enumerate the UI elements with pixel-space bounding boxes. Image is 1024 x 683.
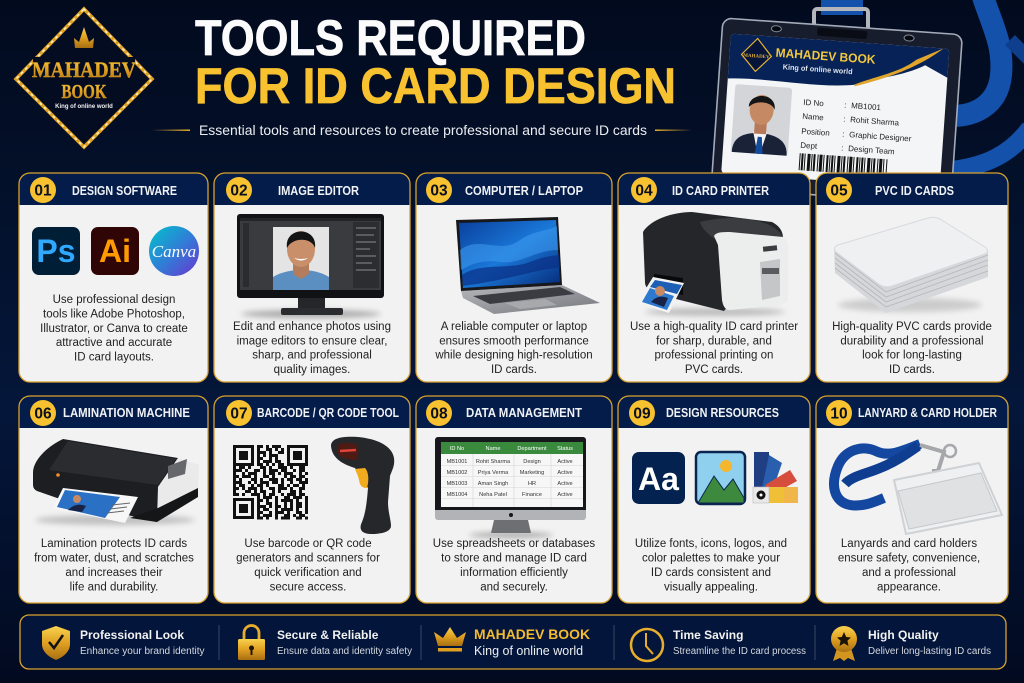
description: Use a high-quality ID card printer bbox=[630, 321, 798, 333]
monitor with photo editor bbox=[237, 214, 384, 318]
description: Use professional design bbox=[53, 294, 175, 306]
description: and increases their bbox=[65, 567, 163, 579]
benefit: professional look: Enhance your brand identity bbox=[80, 646, 205, 657]
heading: COMPUTER / LAPTOP bbox=[465, 184, 583, 198]
card logo bbox=[740, 37, 773, 72]
card holder bbox=[711, 18, 962, 204]
spreadsheet rows: MB1001 bbox=[447, 459, 467, 465]
crown bbox=[74, 27, 94, 48]
card fields: : bbox=[841, 144, 844, 153]
panel: 09 design resources bbox=[618, 396, 810, 603]
description: from water, dust, and scratches bbox=[34, 552, 194, 564]
QR code bbox=[233, 446, 308, 518]
description: Use barcode or QR code bbox=[244, 538, 372, 550]
metal clip bbox=[814, 9, 868, 34]
benefit: secure and reliable: Secure & Reliable bbox=[277, 628, 379, 642]
card fields: Rohit Sharma bbox=[850, 115, 900, 128]
description: Lamination protects ID cards bbox=[41, 538, 187, 550]
laminator bbox=[33, 439, 199, 525]
description: ID cards. bbox=[491, 364, 537, 376]
icon: image bbox=[696, 452, 745, 504]
description: quick verification and bbox=[254, 567, 362, 579]
heading: DATA MANAGEMENT bbox=[466, 406, 582, 420]
panel: 01 design software: 01 bbox=[34, 182, 52, 200]
card fields bbox=[800, 98, 914, 157]
card barcode bbox=[799, 162, 887, 168]
heading: ID CARD PRINTER bbox=[672, 184, 769, 198]
heading: LAMINATION MACHINE bbox=[63, 406, 190, 420]
benefit: time saving bbox=[631, 628, 806, 661]
panel: 08 data management bbox=[416, 396, 612, 603]
card fields: : bbox=[843, 115, 846, 124]
description bbox=[40, 294, 188, 364]
spreadsheet rows: Active bbox=[557, 470, 573, 476]
printed card bbox=[637, 277, 684, 313]
logo book: BOOK bbox=[62, 81, 107, 103]
benefit: secure and reliable bbox=[238, 626, 412, 660]
icon: Illustrator bbox=[91, 227, 139, 275]
panel: 01 design software bbox=[19, 173, 208, 382]
description: tools like Adobe Photoshop, bbox=[43, 308, 185, 320]
laminated card bbox=[53, 488, 138, 523]
panel: 10 lanyard and card holder: 10 bbox=[830, 406, 848, 422]
heading: IMAGE EDITOR bbox=[278, 184, 359, 198]
spreadsheet rows: Name bbox=[486, 446, 500, 452]
description: and a professional bbox=[862, 567, 956, 579]
description bbox=[34, 538, 194, 594]
icon: color palette bbox=[753, 452, 798, 503]
logo tagline: King of online world bbox=[55, 104, 113, 110]
description: Edit and enhance photos using bbox=[233, 321, 391, 333]
subtitle: Essential tools and resources to create professional and secure ID cards bbox=[199, 122, 647, 138]
panel: 10 lanyard and card holder bbox=[816, 396, 1008, 603]
description: Utilize fonts, icons, logos, and bbox=[635, 538, 787, 550]
card fields: Name bbox=[802, 112, 824, 122]
spreadsheet rows: Aman Singh bbox=[478, 481, 508, 487]
description: to store and manage ID card bbox=[441, 552, 587, 564]
spreadsheet rows bbox=[447, 446, 573, 498]
logo name: MAHADEV bbox=[32, 57, 136, 82]
card tagline: King of online world bbox=[782, 62, 853, 76]
panel: 02 image editor bbox=[214, 173, 410, 382]
panel: 06 lamination machine: 06 bbox=[34, 406, 52, 422]
description: Illustrator, or Canva to create bbox=[40, 323, 188, 335]
description: color palettes to make your bbox=[642, 552, 780, 564]
spreadsheet rows: MB1003 bbox=[447, 481, 467, 487]
spreadsheet rows: HR bbox=[528, 481, 536, 487]
ID card printer bbox=[637, 212, 788, 316]
badge: ID card on lanyard bbox=[711, 0, 1024, 204]
description: Use spreadsheets or databases bbox=[433, 538, 595, 550]
panel: 08 data management: 08 bbox=[430, 406, 448, 422]
logo wordmark backing bbox=[33, 57, 135, 79]
footer band bbox=[20, 615, 1006, 669]
panel: 07 barcode and QR code tool bbox=[214, 396, 410, 603]
description bbox=[635, 538, 787, 594]
description: information efficiently bbox=[460, 567, 568, 579]
description bbox=[434, 321, 593, 376]
spreadsheet rows: Active bbox=[557, 492, 573, 498]
description bbox=[236, 538, 380, 594]
panel: 04 ID card printer bbox=[618, 173, 810, 382]
heading: PVC ID CARDS bbox=[875, 184, 954, 198]
description: ID cards. bbox=[889, 364, 935, 376]
heading: LANYARD & CARD HOLDER bbox=[858, 406, 997, 420]
benefit: professional look: Professional Look bbox=[80, 628, 184, 642]
icon: Canva: Canva bbox=[152, 242, 196, 261]
description: image editors to ensure clear, bbox=[237, 335, 387, 347]
icon: Photoshop bbox=[32, 227, 80, 275]
spreadsheet rows: Marketing bbox=[520, 470, 544, 476]
icon: Illustrator: Ai bbox=[99, 233, 131, 269]
spreadsheet rows: MB1002 bbox=[447, 470, 467, 476]
description: for sharp, durable, and bbox=[656, 335, 772, 347]
logo: Mahadev Book bbox=[16, 9, 152, 147]
card fields: MB1001 bbox=[851, 101, 882, 112]
description: Lanyards and card holders bbox=[841, 538, 977, 550]
title line one: TOOLS REQUIRED bbox=[195, 10, 586, 66]
panel: 09 design resources: 09 bbox=[633, 406, 651, 422]
barcode scanner bbox=[331, 437, 394, 534]
card photo bbox=[731, 84, 792, 156]
laptop bbox=[456, 217, 600, 314]
spreadsheet rows: MB1004 bbox=[447, 492, 467, 498]
panel: 05 PVC ID cards: 05 bbox=[830, 182, 848, 200]
benefit: time saving: Time Saving bbox=[673, 628, 743, 642]
card fields: Position bbox=[801, 127, 830, 138]
card fields: Design Team bbox=[848, 144, 895, 156]
heading: DESIGN SOFTWARE bbox=[72, 184, 177, 198]
icon: Photoshop: Ps bbox=[36, 233, 76, 269]
description: generators and scanners for bbox=[236, 552, 380, 564]
panel: 06 lamination machine bbox=[19, 396, 208, 603]
description: while designing high-resolution bbox=[434, 350, 593, 362]
description: professional printing on bbox=[655, 350, 773, 362]
title bbox=[195, 10, 676, 114]
card brand: MAHADEV BOOK bbox=[775, 46, 876, 67]
icon: Canva bbox=[149, 226, 199, 276]
description: ensures smooth performance bbox=[439, 335, 589, 347]
description: life and durability. bbox=[70, 582, 158, 594]
spreadsheet rows: Rohit Sharma bbox=[476, 459, 511, 465]
description: High-quality PVC cards provide bbox=[832, 321, 992, 333]
icon: fonts bbox=[632, 452, 685, 504]
description: PVC cards. bbox=[685, 364, 743, 376]
spreadsheet rows: Design bbox=[523, 459, 541, 465]
spreadsheet rows: Active bbox=[557, 481, 573, 487]
benefit: time saving: Streamline the ID card process bbox=[673, 646, 806, 657]
spreadsheet rows: Department bbox=[517, 446, 547, 452]
description: look for long-lasting bbox=[862, 350, 962, 362]
description bbox=[233, 321, 391, 376]
panel: 05 PVC ID cards bbox=[816, 173, 1008, 382]
card fields: ID No bbox=[803, 98, 825, 108]
heading: DESIGN RESOURCES bbox=[666, 406, 779, 420]
card fields: Graphic Designer bbox=[849, 130, 912, 143]
spreadsheet rows: Neha Patel bbox=[479, 492, 507, 498]
description: A reliable computer or laptop bbox=[441, 321, 587, 333]
panel: 07 barcode and QR code tool: 07 bbox=[230, 406, 248, 422]
description: sharp, and professional bbox=[252, 350, 372, 362]
benefit: high quality: Deliver long-lasting ID cards bbox=[868, 646, 991, 657]
description: ID card layouts. bbox=[74, 352, 154, 364]
icon: fonts: Aa bbox=[638, 461, 679, 497]
panel: 03 computer laptop bbox=[416, 173, 612, 382]
description bbox=[838, 538, 980, 594]
spreadsheet rows: Priya Verma bbox=[478, 470, 509, 476]
description: ID cards consistent and bbox=[651, 567, 771, 579]
description: secure access. bbox=[270, 582, 346, 594]
brand: Mahadev Book: MAHADEV BOOK bbox=[474, 626, 590, 642]
description bbox=[832, 321, 992, 376]
brand: Mahadev Book: King of online world bbox=[474, 644, 583, 658]
description: durability and a professional bbox=[840, 335, 984, 347]
description: visually appealing. bbox=[664, 582, 758, 594]
lanyard and holder bbox=[834, 444, 1002, 534]
card fields: : bbox=[842, 130, 845, 139]
panel: 02 image editor: 02 bbox=[230, 182, 248, 200]
description bbox=[433, 538, 595, 594]
description: ensure safety, convenience, bbox=[838, 552, 980, 564]
description bbox=[630, 321, 798, 376]
spreadsheet rows: ID No bbox=[450, 446, 464, 452]
card fields: Dept bbox=[800, 141, 818, 151]
stack of PVC cards bbox=[834, 217, 988, 313]
spreadsheet rows: Finance bbox=[522, 492, 542, 498]
description: attractive and accurate bbox=[56, 337, 172, 349]
lanyard straps bbox=[842, 0, 1024, 170]
desktop with spreadsheet bbox=[435, 437, 586, 538]
description: quality images. bbox=[274, 364, 350, 376]
diamond frame bbox=[16, 9, 152, 147]
benefit: high quality bbox=[831, 626, 991, 661]
benefit: secure and reliable: Ensure data and identity safety bbox=[277, 646, 412, 657]
description: and securely. bbox=[480, 582, 548, 594]
card logo: MAHADEV bbox=[743, 54, 770, 60]
title line two: FOR ID CARD DESIGN bbox=[195, 58, 676, 114]
brand: Mahadev Book bbox=[434, 626, 590, 658]
card fields: : bbox=[844, 101, 847, 110]
panel: 04 ID card printer: 04 bbox=[635, 182, 653, 200]
benefit: professional look bbox=[42, 626, 205, 660]
panel: 03 computer laptop: 03 bbox=[430, 182, 448, 200]
description: appearance. bbox=[877, 582, 941, 594]
spreadsheet rows: Status bbox=[557, 446, 573, 452]
printed ID card bbox=[721, 34, 949, 189]
spreadsheet rows: Active bbox=[557, 459, 573, 465]
benefit: high quality: High Quality bbox=[868, 628, 939, 642]
heading: BARCODE / QR CODE TOOL bbox=[257, 406, 399, 420]
